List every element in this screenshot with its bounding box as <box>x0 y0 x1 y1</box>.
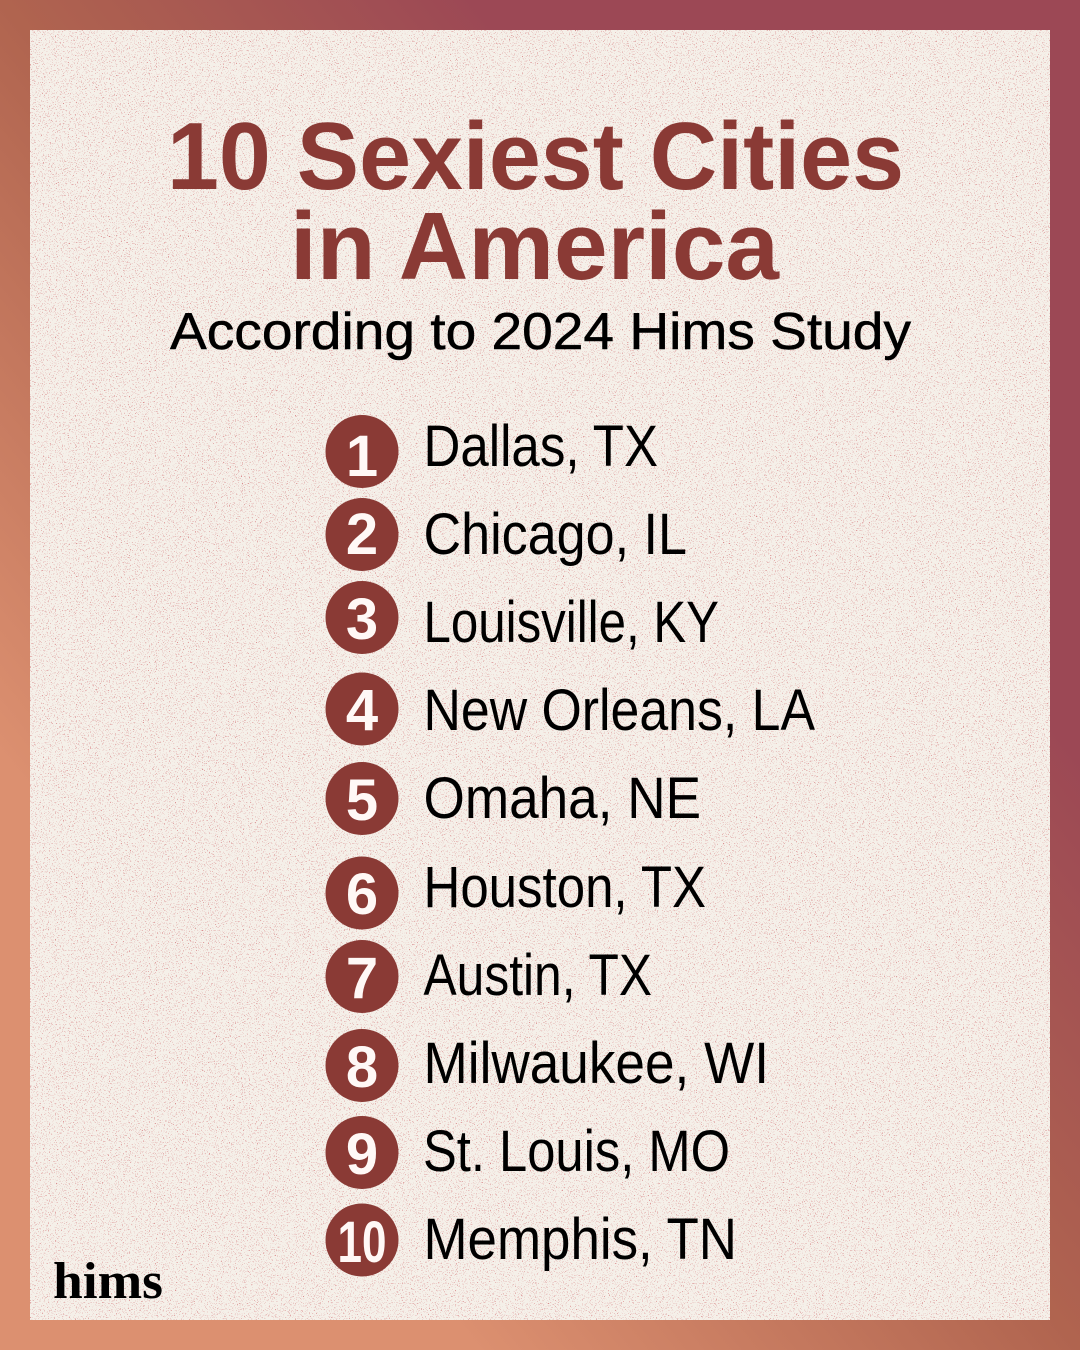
rank 6: Houston: Houston, TX <box>424 855 706 920</box>
title: in America <box>290 193 780 300</box>
title: 10 Sexiest Cities <box>167 103 904 210</box>
subtitle: According to 2024 Hims Study <box>170 303 911 361</box>
rank 2: Chicago <box>326 498 687 571</box>
rank 4: New Orleans: New Orleans, LA <box>424 678 815 743</box>
rank 5: Omaha: Omaha, NE <box>424 766 701 831</box>
rank 10: Memphis: 10 <box>338 1210 386 1275</box>
rank 7: Austin: Austin, TX <box>424 943 652 1008</box>
rank 1: Dallas: Dallas, TX <box>424 414 658 479</box>
rank 1: Dallas: 1 <box>346 424 378 489</box>
rank 3: Louisville: Louisville, KY <box>424 590 719 655</box>
rank 4: New Orleans <box>326 672 815 746</box>
rank 9: St. Louis <box>326 1116 730 1189</box>
rank 6: Houston: 6 <box>346 862 378 927</box>
rank 10: Memphis <box>326 1204 737 1276</box>
rank 8: Milwaukee: 8 <box>346 1035 378 1100</box>
rank 1: Dallas <box>326 414 658 489</box>
rank 8: Milwaukee <box>326 1029 769 1102</box>
rank 5: Omaha <box>326 762 701 835</box>
ranked list of cities <box>326 414 815 1276</box>
rank 7: Austin: 7 <box>346 946 378 1011</box>
rank 2: Chicago: Chicago, IL <box>424 502 687 567</box>
rank 6: Houston <box>326 855 706 930</box>
rank 3: Louisville: 3 <box>346 587 378 652</box>
rank 9: St. Louis: St. Louis, MO <box>423 1119 730 1184</box>
rank 8: Milwaukee: Milwaukee, WI <box>424 1031 769 1096</box>
rank 3: Louisville <box>326 581 719 655</box>
rank 2: Chicago: 2 <box>346 502 378 567</box>
rank 10: Memphis: Memphis, TN <box>424 1207 737 1272</box>
title <box>167 103 904 300</box>
hims logo: hims <box>53 1253 163 1310</box>
rank 4: New Orleans: 4 <box>346 678 378 743</box>
rank 9: St. Louis: 9 <box>346 1122 378 1187</box>
rank 7: Austin <box>326 940 652 1013</box>
rank 5: Omaha: 5 <box>346 768 378 833</box>
